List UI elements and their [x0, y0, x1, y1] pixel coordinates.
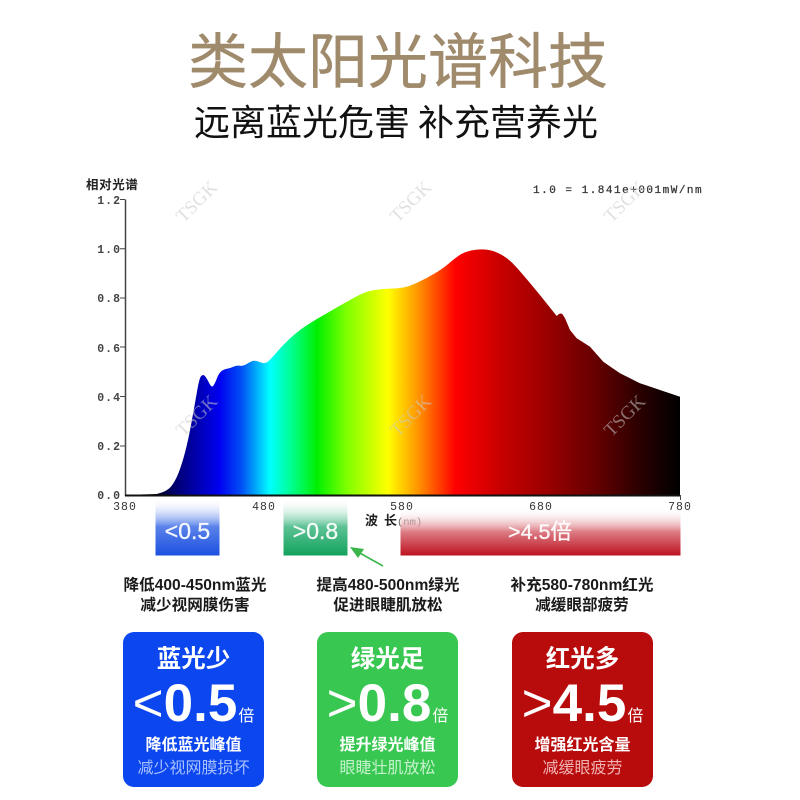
y axis labels: 0.6	[97, 343, 121, 356]
range box: green	[284, 498, 348, 556]
panel: red light: 红光多	[546, 646, 619, 673]
description: green: 促进眼睫肌放松	[333, 597, 443, 614]
y axis labels: 0.0	[97, 490, 121, 503]
watermarks: TSGK	[172, 177, 222, 227]
panel: green light	[317, 632, 458, 787]
panel: green light: >0.8倍	[327, 674, 448, 733]
panel: green light: 眼睫壮肌放松	[339, 760, 436, 777]
scale note: 1.0 = 1.841e+001mW/nm	[533, 185, 703, 197]
panel: red light: 减缓眼疲劳	[542, 760, 622, 777]
range box: blue: <0.5	[165, 518, 210, 544]
panel: green light: 绿光足	[351, 646, 424, 673]
description: green	[316, 576, 460, 614]
description: blue: 减少视网膜伤害	[140, 597, 250, 614]
y axis labels: 1.2	[97, 195, 121, 208]
x axis title: (nm)	[397, 517, 422, 529]
watermarks: TSGK	[600, 177, 650, 227]
panel: blue light: <0.5倍	[133, 674, 254, 733]
panel: red light: >4.5倍	[522, 674, 643, 733]
range box: blue	[156, 498, 220, 556]
description: green: 提高480-500nm绿光	[316, 577, 460, 594]
x axis labels: 380	[113, 501, 137, 514]
description: blue: 降低400-450nm蓝光	[124, 577, 266, 594]
panel: blue light	[123, 632, 264, 787]
panel: blue light: 减少视网膜损坏	[137, 760, 250, 777]
x axis labels: 480	[252, 501, 276, 514]
x axis labels: 780	[668, 501, 692, 514]
watermarks: TSGK	[386, 177, 436, 227]
subtitle: 远离蓝光危害 补充营养光	[194, 94, 598, 146]
x axis title: 波长	[365, 513, 403, 528]
y axis labels: 0.8	[97, 293, 121, 306]
y axis labels: 0.4	[97, 392, 121, 405]
description: red	[510, 576, 654, 614]
watermarks: TSGK	[600, 391, 650, 441]
x axis labels: 580	[390, 501, 414, 514]
y axis title: 相对光谱	[86, 177, 138, 192]
panel: green light: 提升绿光峰值	[339, 737, 436, 754]
description: blue	[124, 576, 266, 614]
description: red: 补充580-780nm红光	[510, 577, 654, 594]
watermarks	[172, 177, 650, 441]
spectrum area	[125, 249, 680, 495]
watermarks: TSGK	[172, 391, 222, 441]
y axis labels: 1.0	[97, 244, 121, 257]
panel: red light	[512, 632, 653, 787]
x axis labels: 680	[529, 501, 553, 514]
range box: red: >4.5倍	[508, 520, 572, 544]
panel: red light: 增强红光含量	[534, 737, 630, 754]
panel: blue light: 蓝光少	[157, 646, 230, 673]
title: 类太阳光谱科技	[188, 14, 608, 101]
panel: blue light: 降低蓝光峰值	[145, 737, 242, 754]
arrow	[350, 547, 383, 566]
range box: green: >0.8	[293, 518, 338, 544]
range box: red	[400, 508, 680, 556]
description: red: 减缓眼部疲劳	[535, 597, 629, 614]
x axis title	[365, 513, 422, 529]
y axis labels: 0.2	[97, 441, 121, 454]
x axis labels	[113, 501, 692, 514]
y axis labels	[97, 195, 121, 503]
axes	[120, 200, 680, 500]
watermarks: TSGK	[386, 391, 436, 441]
